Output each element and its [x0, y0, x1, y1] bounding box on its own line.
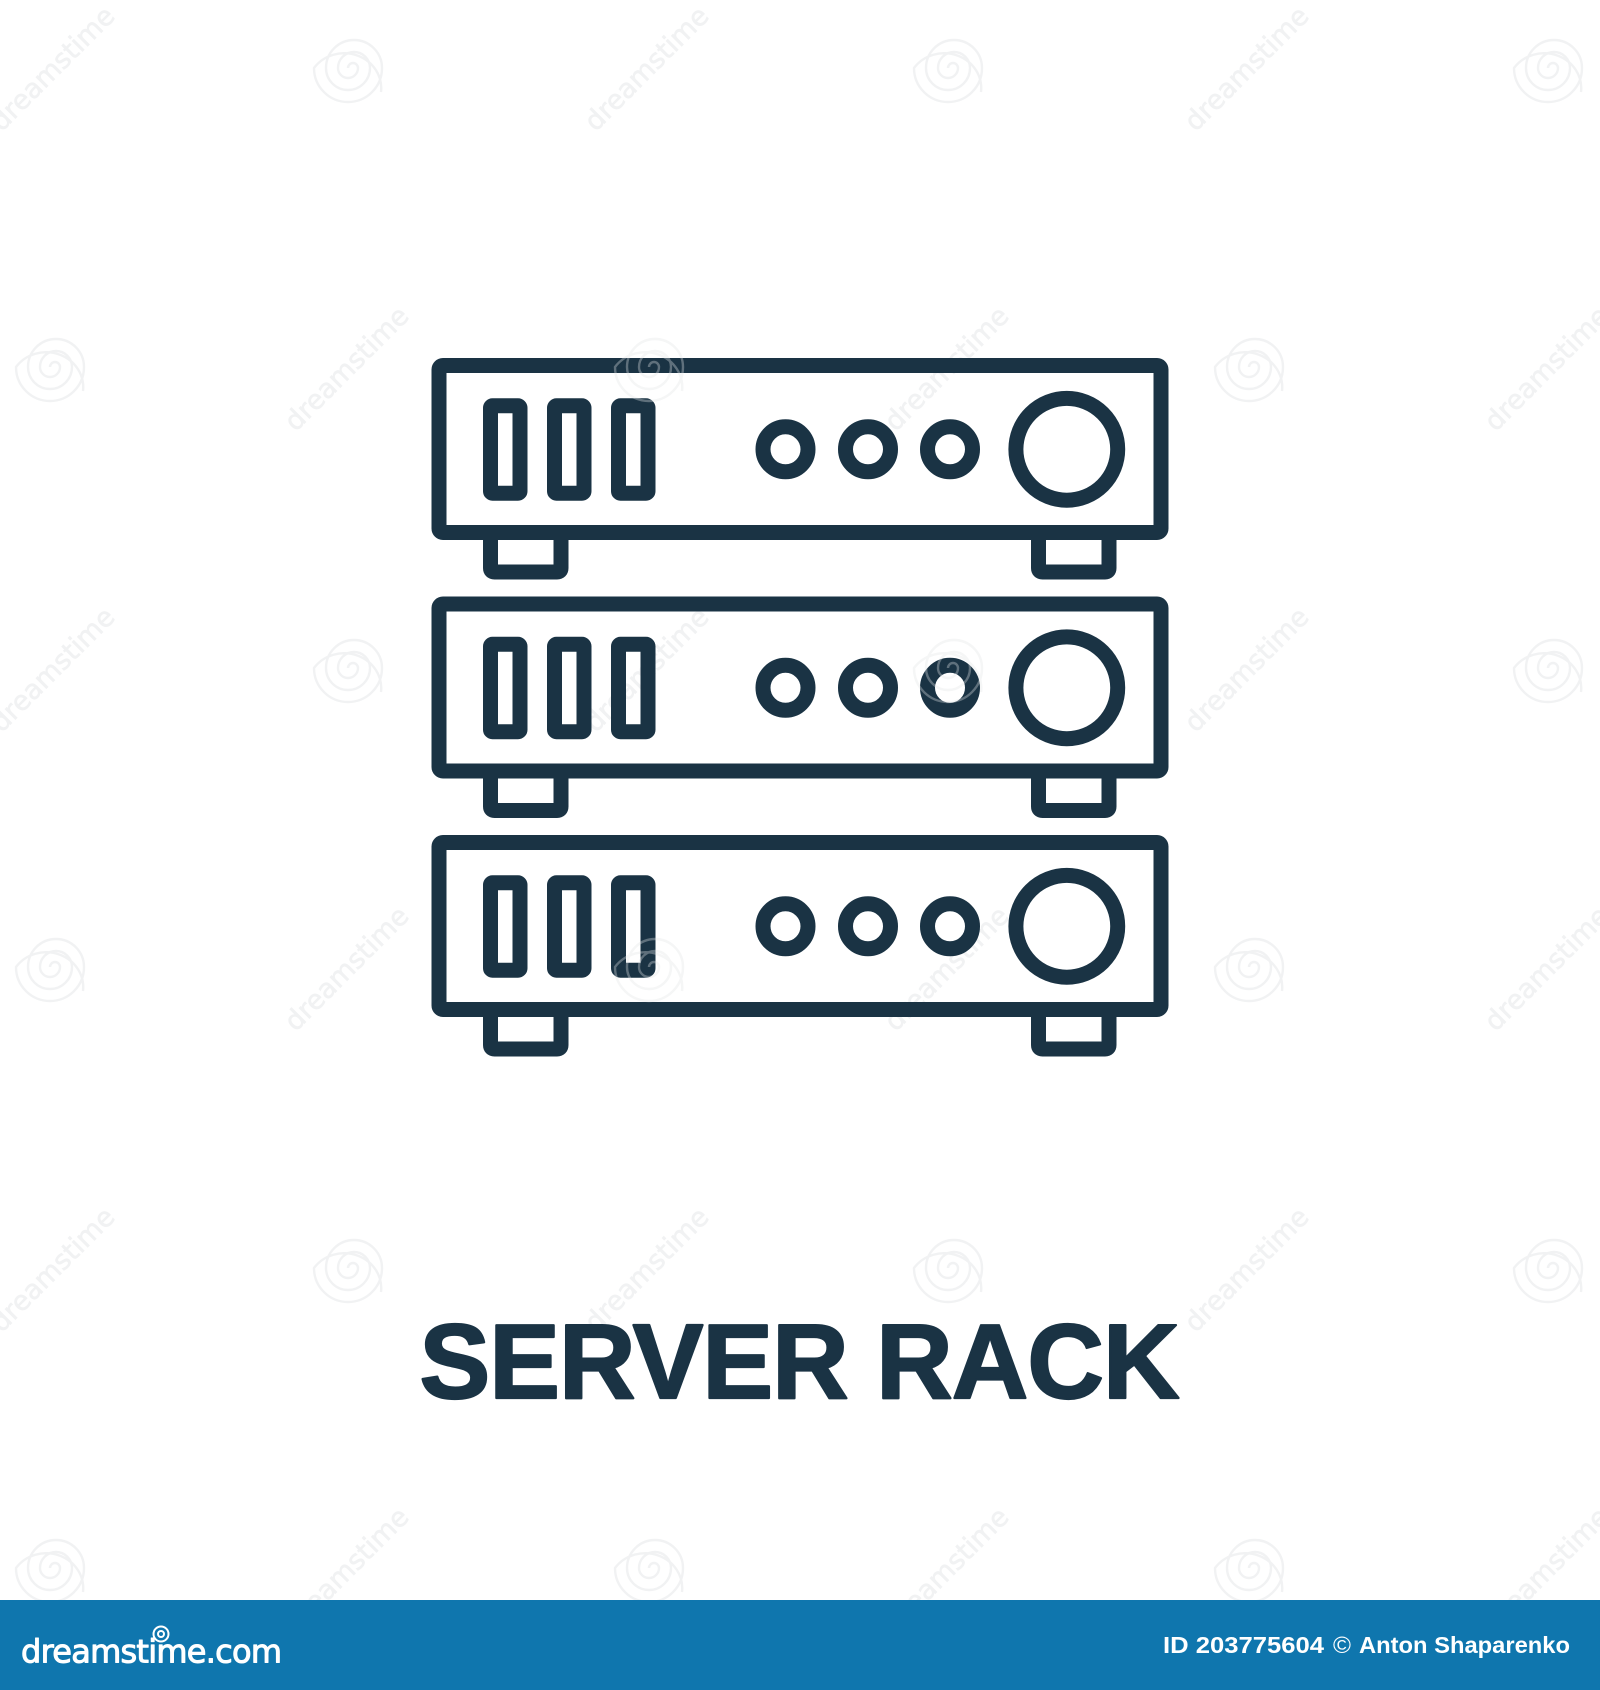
footer credit: ID 203775604 [1163, 1632, 1324, 1658]
watermark text: dreamstime [579, 602, 715, 738]
watermark text: dreamstime [1179, 602, 1315, 738]
server unit 3 [439, 842, 1161, 1049]
footer bar [0, 1600, 1600, 1690]
footer logo: dreamstime.com [21, 1632, 282, 1670]
watermark text: dreamstime [279, 1502, 415, 1638]
watermark text: dreamstime [879, 301, 1015, 437]
watermark text: dreamstime [579, 1202, 715, 1338]
watermark text: dreamstime [879, 1502, 1015, 1638]
server unit 1 [439, 366, 1161, 572]
title: SERVER RACK [420, 1303, 1180, 1421]
footer credit: © [1333, 1632, 1351, 1658]
footer credit [1163, 1632, 1570, 1658]
watermark text: dreamstime [579, 1, 715, 137]
watermark overlay on icon [615, 339, 982, 1001]
watermark text: dreamstime [1179, 1202, 1315, 1338]
server unit 2 [439, 604, 1161, 810]
watermark text: dreamstime [279, 901, 415, 1037]
watermark text: dreamstime [879, 901, 1015, 1037]
watermark text: dreamstime [279, 301, 415, 437]
icon: logo spiral [154, 1626, 168, 1642]
icon: server rack [439, 366, 1161, 1049]
footer credit: Anton Shaparenko [1359, 1632, 1570, 1658]
watermark text: dreamstime [1179, 1, 1315, 137]
